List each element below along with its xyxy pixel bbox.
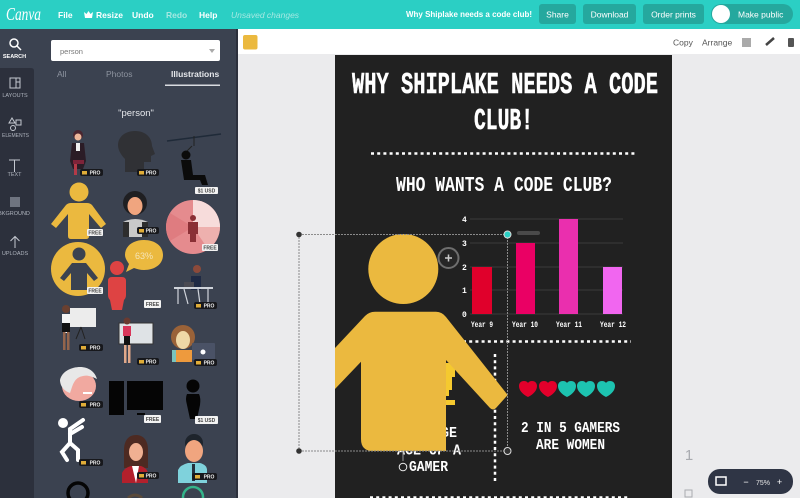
bar chart: 1 <box>462 287 467 296</box>
button: share: Share <box>546 10 569 20</box>
title: CLUB! <box>474 104 533 139</box>
menu items: Help <box>199 10 217 20</box>
size label <box>517 231 540 235</box>
bar chart: 3 <box>462 240 467 249</box>
thumbnail: woman with laptop <box>171 325 215 362</box>
tab: uploads: UPLOADS <box>2 251 28 257</box>
color swatch <box>243 35 258 50</box>
bar chart: Year 12 <box>600 321 626 330</box>
menu items <box>58 10 300 20</box>
pro badges: PRO <box>204 474 215 480</box>
toolbar actions: Copy <box>673 38 694 48</box>
menu items: Unsaved changes <box>231 10 300 20</box>
bar chart: Year 9 <box>471 321 493 330</box>
pro badges: PRO <box>90 460 101 466</box>
thumbnail: red person <box>108 261 126 310</box>
bar chart: Year 10 <box>512 321 538 330</box>
thumbnail: yellow circle person <box>51 242 105 296</box>
thumbnail: presenter one <box>62 305 96 350</box>
search panel controls <box>51 40 220 119</box>
tab: search: SEARCH <box>3 54 26 60</box>
bar chart <box>462 216 626 330</box>
thumbnail: yellow person <box>51 182 106 239</box>
pro badges: PRO <box>204 360 215 366</box>
free and priced badges: FREE <box>88 230 102 236</box>
gamer age text <box>397 425 461 476</box>
thumbnail: person with dark hair <box>123 191 148 237</box>
menu items: Resize <box>96 10 123 20</box>
thumbnail: woman with glasses <box>122 435 148 483</box>
zoom control: + <box>777 477 782 487</box>
page number: 1 <box>685 447 693 464</box>
pro badges: PRO <box>204 304 215 310</box>
thumbnail: seated woman <box>70 130 86 175</box>
tab labels: Photos <box>106 69 132 79</box>
logo: Canva <box>6 4 41 24</box>
thumbnail: old man head <box>60 367 97 401</box>
tab: search <box>3 39 26 60</box>
thumbnail: dark silhouette <box>186 380 200 419</box>
thumbnail: bottom rings <box>68 483 203 498</box>
tab: uploads <box>2 236 28 257</box>
menu items: File <box>58 10 73 20</box>
gamer age text: GAMER <box>409 459 448 476</box>
free and priced badges: FREE <box>203 246 217 252</box>
bar chart: Year 11 <box>556 321 582 330</box>
thumbnail: chair lift <box>167 134 221 185</box>
pro badges: PRO <box>146 360 157 366</box>
editor toolbar <box>238 29 800 54</box>
menu items: Undo <box>132 10 154 20</box>
move handle <box>438 248 458 268</box>
pro badges: PRO <box>146 228 157 234</box>
tab: layouts <box>2 78 28 99</box>
zoom control <box>708 469 793 494</box>
button: share <box>539 4 576 24</box>
tab: background <box>0 197 30 217</box>
thumbnail: pie person <box>166 200 220 254</box>
panel edge <box>236 29 238 498</box>
button: download: Download <box>591 10 629 20</box>
free and priced badges <box>87 187 218 424</box>
zoom control: 75% <box>756 480 770 487</box>
bar chart: 2 <box>462 264 467 273</box>
tab: text <box>7 160 22 178</box>
free and priced badges: FREE <box>88 288 102 294</box>
tab: elements <box>2 118 29 139</box>
thumbnail: man in shirt <box>178 434 207 483</box>
tab labels: Illustrations <box>171 69 219 79</box>
gamers statistic text: ARE WOMEN <box>536 437 605 454</box>
button: download <box>583 4 636 24</box>
tab: layouts: LAYOUTS <box>2 93 28 99</box>
selected yellow person graphic <box>335 234 508 451</box>
button: order prints: Order prints <box>651 10 696 20</box>
hearts <box>519 381 615 397</box>
thumbnail: running figure <box>60 420 83 460</box>
thumbnail: head silhouette <box>118 131 155 172</box>
page number <box>685 447 693 497</box>
tab labels: All <box>57 69 67 79</box>
gamer age text: AGE OF A <box>397 442 461 460</box>
free and priced badges: FREE <box>146 302 160 308</box>
zoom control: − <box>743 477 749 487</box>
thumbnail: presenter two <box>119 318 153 363</box>
toolbar actions <box>673 38 794 48</box>
subheading: WHO WANTS A CODE CLUB? <box>396 175 612 198</box>
thumbnail: black computer <box>109 381 163 415</box>
thumbnail: percentage speech bubble: 63% <box>135 251 153 261</box>
free and priced badges: $1 USD <box>198 188 216 194</box>
infographic page <box>335 55 672 498</box>
illustration thumbnails <box>51 130 221 498</box>
toolbar actions: Arrange <box>702 38 733 48</box>
pro badges: PRO <box>90 346 101 352</box>
document title: Why Shiplake needs a code club! <box>406 9 532 19</box>
thumbnail badges <box>79 169 218 480</box>
pro badges: PRO <box>146 170 157 176</box>
search box <box>51 40 220 61</box>
rotate handle <box>399 463 407 471</box>
bar chart: 4 <box>462 216 467 225</box>
pro badges: PRO <box>146 474 157 480</box>
trophy icon <box>445 363 455 405</box>
pro badges: PRO <box>90 402 101 408</box>
thumbnail: woman at desk <box>174 265 213 304</box>
tab labels <box>57 69 220 86</box>
button: order prints <box>643 4 704 24</box>
search box: person <box>60 47 83 56</box>
top navigation bar <box>0 0 800 29</box>
title <box>352 68 658 139</box>
thumbnail: percentage speech bubble <box>125 240 163 272</box>
selection frame and handles <box>296 231 540 471</box>
gamer age text: AVERAGE <box>401 425 457 442</box>
button: make public <box>711 4 793 24</box>
menu items: Redo <box>166 10 187 20</box>
pro badges: PRO <box>90 170 101 176</box>
button: make public: Make public <box>738 10 784 20</box>
left icon rail <box>0 29 237 498</box>
results heading: "person" <box>118 108 154 119</box>
tab: elements: ELEMENTS <box>2 133 29 139</box>
pro badges <box>79 169 217 480</box>
tab: text: TEXT <box>7 172 22 178</box>
gamers statistic text <box>521 420 620 454</box>
bar chart: 0 <box>462 311 467 320</box>
free and priced badges: FREE <box>146 417 160 423</box>
gamers statistic text: 2 IN 5 GAMERS <box>521 420 620 437</box>
free and priced badges: $1 USD <box>198 418 216 424</box>
